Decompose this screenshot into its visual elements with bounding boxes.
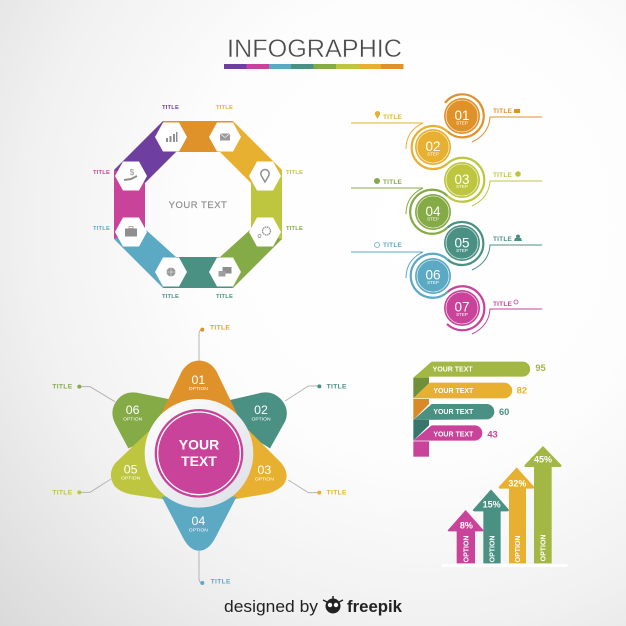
octagon titles (93, 105, 303, 300)
petal 01 (160, 361, 238, 417)
title: INFOGRAPHIC (227, 35, 402, 63)
step 01: STEP (456, 120, 468, 126)
arrow 45% (524, 446, 561, 563)
octagon titles: TITLE (216, 105, 233, 111)
step 05: STEP (456, 248, 468, 253)
arrow 32%: OPTION (515, 536, 522, 562)
bar 60 (413, 404, 509, 420)
step 06: 06 (425, 268, 441, 282)
ribbon folds (413, 378, 429, 457)
bar 82: YOUR TEXT (433, 388, 474, 395)
panel: arrow chart (442, 446, 568, 567)
icon: briefcase hexagon (115, 218, 147, 246)
footer credit (224, 596, 403, 616)
step 02: STEP (427, 152, 439, 156)
bar 82 (413, 383, 527, 398)
panel: octagon cycle (93, 105, 303, 300)
step titles: TITLE (383, 179, 403, 186)
bar 82: 82 (517, 385, 527, 395)
arrow 8% (448, 510, 483, 563)
icon: pin hexagon (249, 162, 281, 190)
icon: chat hexagon (209, 258, 241, 286)
bar 60: 60 (499, 407, 509, 417)
leader dots (77, 328, 321, 585)
step 04: 04 (425, 204, 441, 219)
centre label: YOUR TEXT (169, 200, 227, 211)
bar 60: YOUR TEXT (433, 409, 474, 416)
petal 02 (230, 392, 287, 448)
icon: globe hexagon (155, 258, 187, 286)
step 05: 05 (454, 236, 470, 250)
octagon segments (114, 121, 282, 288)
flower titles: TITLE (210, 325, 230, 332)
footer credit: freepik (347, 597, 403, 616)
bar 43 (413, 425, 498, 441)
flower titles: TITLE (211, 578, 231, 585)
bar 95: 95 (535, 363, 546, 373)
panel: bar chart ribbon (413, 362, 546, 457)
step titles (383, 108, 513, 308)
flower titles: TITLE (52, 383, 73, 390)
octagon titles: TITLE (93, 170, 110, 176)
flower titles: TITLE (327, 490, 347, 497)
step titles: TITLE (493, 236, 513, 243)
icon: money hand hexagon (115, 162, 147, 190)
step 05 (444, 225, 480, 261)
petal labels (121, 373, 274, 533)
panel: flower diagram (52, 325, 347, 585)
step 02: 02 (425, 139, 441, 154)
arrow 45%: 45% (534, 454, 552, 464)
step 03: 03 (454, 172, 470, 187)
icon: mail hexagon (209, 122, 241, 152)
arrow 8%: OPTION (463, 536, 470, 562)
petal labels: OPTION (251, 416, 271, 422)
bar 95 (413, 362, 546, 378)
title colour bar (224, 64, 404, 69)
icon: freepik mascot (323, 596, 343, 614)
step titles: TITLE (493, 172, 513, 179)
step 07 (444, 290, 480, 326)
arrow 15%: OPTION (489, 536, 496, 562)
step 07: STEP (456, 312, 468, 317)
petal labels: OPTION (189, 527, 208, 533)
step 03: STEP (456, 184, 468, 189)
petal labels: 01 (191, 373, 205, 387)
flower titles (52, 325, 347, 585)
icon: gear hexagon (249, 218, 281, 246)
step rings (410, 94, 484, 330)
octagon titles: TITLE (162, 105, 179, 111)
centre circle: YOUR (179, 436, 219, 452)
petal labels: 02 (254, 403, 268, 417)
step titles: TITLE (493, 108, 513, 115)
octagon titles: TITLE (286, 170, 303, 176)
petal labels: OPTION (189, 386, 208, 392)
step title icons (374, 109, 522, 304)
centre circle (155, 409, 243, 498)
arrow 8%: 8% (460, 520, 473, 530)
centre circle: TEXT (181, 453, 217, 469)
petal labels: 05 (124, 462, 138, 476)
step 03 (444, 162, 480, 198)
step 01: 01 (454, 108, 470, 123)
step 06: STEP (427, 280, 439, 285)
octagon titles: TITLE (216, 294, 233, 300)
icon: money hand hexagon: $ (130, 168, 135, 177)
bar 43: YOUR TEXT (433, 431, 474, 438)
petal 03 (207, 430, 287, 501)
icon: chart hexagon (155, 122, 187, 152)
octagon titles: TITLE (162, 294, 179, 300)
step 04 (415, 194, 451, 230)
footer credit: designed by (224, 598, 319, 616)
step 04: STEP (427, 216, 439, 222)
petal 05 (111, 432, 190, 500)
panel: steps timeline (351, 94, 542, 334)
centre white ring (145, 399, 253, 508)
petal labels: OPTION (255, 476, 274, 482)
arrow 32%: 32% (508, 478, 526, 488)
step 06 (415, 258, 451, 294)
step titles: TITLE (493, 301, 513, 308)
arrow 45%: OPTION (541, 535, 548, 561)
bar 95: YOUR TEXT (433, 366, 473, 373)
step 02 (415, 129, 451, 165)
arrow 15% (473, 489, 509, 563)
leader lines (79, 330, 319, 583)
petal labels: OPTION (121, 476, 141, 482)
petal labels: OPTION (123, 416, 143, 422)
arrow 32% (499, 467, 534, 563)
step 01 (444, 98, 480, 134)
petal 06 (112, 392, 173, 448)
flower titles: TITLE (52, 490, 73, 497)
step titles: TITLE (383, 242, 403, 249)
petal labels: 04 (191, 514, 205, 528)
octagon titles: TITLE (286, 226, 303, 232)
petal labels: 06 (126, 403, 140, 417)
flower titles: TITLE (327, 383, 347, 390)
step leader lines (351, 117, 542, 334)
bar 43: 43 (487, 429, 498, 439)
petal 04 (162, 497, 237, 551)
arrow 15%: 15% (483, 499, 501, 509)
octagon titles: TITLE (93, 226, 110, 232)
step 07: 07 (454, 300, 470, 314)
step titles: TITLE (383, 114, 403, 121)
petal labels: 03 (257, 463, 271, 477)
base line (442, 564, 568, 567)
